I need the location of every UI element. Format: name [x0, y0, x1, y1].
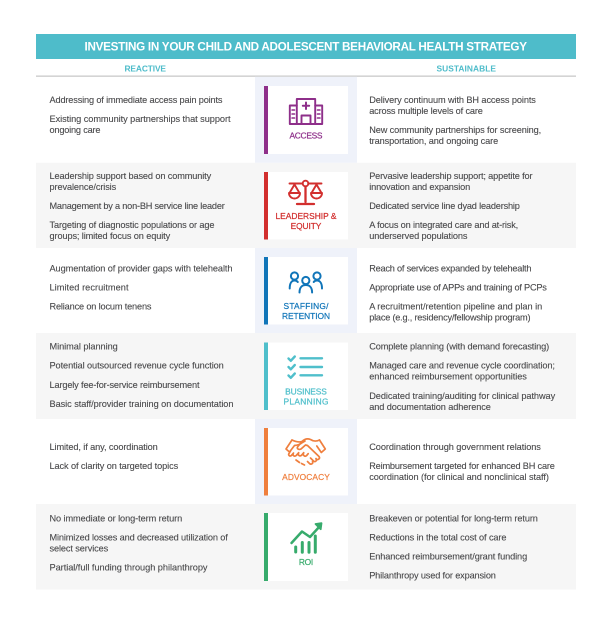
icon: people: [290, 272, 322, 292]
leadership sustainable text: innovation and expansion: [369, 182, 470, 192]
label: roi: ROI: [299, 557, 313, 567]
roi sustainable text: Reductions in the total cost of care: [369, 532, 506, 542]
leadership sustainable text: underserved populations: [369, 231, 468, 241]
access sustainable text: transportation, and ongoing care: [369, 136, 498, 146]
advocacy reactive text: [50, 442, 179, 471]
title banner: INVESTING IN YOUR CHILD AND ADOLESCENT BEHAVIORAL HEALTH STRATEGY: [84, 41, 527, 54]
label: business planning: PLANNING: [284, 396, 328, 406]
leadership reactive text: Management by a non-BH service line leader: [50, 201, 225, 211]
roi sustainable text: [369, 513, 538, 580]
leadership reactive text: Leadership support based on community: [50, 171, 212, 181]
roi reactive text: No immediate or long-term return: [50, 513, 182, 523]
advocacy sustainable text: Coordination through government relations: [369, 442, 541, 452]
leadership sustainable text: Pervasive leadership support; appetite for: [369, 171, 532, 181]
staffing sustainable text: Reach of services expanded by telehealth: [369, 263, 532, 273]
access sustainable text: across multiple levels of care: [369, 106, 483, 116]
icon: growth chart: [292, 523, 322, 552]
staffing reactive text: Augmentation of provider gaps with telehealth: [50, 263, 232, 273]
advocacy sustainable text: [369, 442, 555, 482]
business planning reactive text: Minimal planning: [50, 342, 118, 352]
icon: handshake: [286, 439, 325, 465]
business planning sustainable text: enhanced reimbursement opportunities: [369, 372, 527, 382]
access sustainable text: Delivery continuum with BH access points: [369, 95, 536, 105]
business planning sustainable text: Managed care and revenue cycle coordination;: [369, 361, 555, 371]
column heading: sustainable: SUSTAINABLE: [436, 64, 496, 74]
leadership reactive text: [50, 171, 225, 241]
label: access: ACCESS: [290, 130, 323, 140]
leadership card: [264, 172, 348, 240]
staffing reactive text: Reliance on locum tenens: [50, 301, 152, 311]
icon: checklist: [288, 356, 322, 378]
roi card: [264, 513, 348, 581]
roi reactive text: Minimized losses and decreased utilization of: [50, 532, 228, 542]
business planning card: [264, 342, 348, 410]
business planning reactive text: Basic staff/provider training on documentation: [50, 399, 234, 409]
business planning sustainable text: [369, 342, 556, 412]
staffing sustainable text: [369, 263, 547, 323]
business planning reactive text: [50, 342, 234, 409]
icon: scales: [289, 181, 322, 204]
advocacy reactive text: Limited, if any, coordination: [50, 442, 158, 452]
label: staffing and retention: STAFFING/: [284, 301, 329, 311]
label: leadership and equity: EQUITY: [291, 221, 322, 231]
leadership sustainable text: Dedicated service line dyad leadership: [369, 201, 520, 211]
staffing reactive text: Limited recruitment: [50, 282, 129, 292]
access sustainable text: New community partnerships for screening,: [369, 125, 541, 135]
advocacy sustainable text: Reimbursement targeted for enhanced BH care: [369, 461, 555, 471]
roi sustainable text: Enhanced reimbursement/grant funding: [369, 551, 527, 561]
business planning reactive text: Largely fee-for-service reimbursement: [50, 380, 200, 390]
staffing card: [264, 257, 348, 324]
roi reactive text: [50, 513, 228, 572]
label: advocacy: ADVOCACY: [282, 472, 330, 482]
access reactive text: Addressing of immediate access pain points: [50, 95, 223, 105]
leadership reactive text: Targeting of diagnostic populations or age: [50, 220, 214, 230]
business planning reactive text: Potential outsourced revenue cycle function: [50, 361, 224, 371]
leadership sustainable text: A focus on integrated care and at-risk,: [369, 220, 518, 230]
row: leadership and equity: [36, 163, 576, 248]
leadership reactive text: groups; limited focus on equity: [50, 231, 171, 241]
label: leadership and equity: [276, 211, 337, 231]
advocacy card: [264, 428, 348, 496]
business planning sustainable text: Complete planning (with demand forecasting): [369, 342, 549, 352]
icon: hospital: [290, 99, 322, 124]
label: business planning: BUSINESS: [285, 386, 327, 396]
row: business planning: [36, 333, 576, 419]
roi sustainable text: Philanthropy used for expansion: [369, 570, 496, 580]
row: access: [50, 77, 541, 163]
label: staffing and retention: [282, 301, 330, 321]
row: advocacy: [50, 419, 555, 504]
roi reactive text: Partial/full funding through philanthropy: [50, 562, 208, 572]
access sustainable text: [369, 95, 541, 146]
label: staffing and retention: RETENTION: [282, 311, 330, 321]
access card: [264, 86, 348, 154]
roi sustainable text: Breakeven or potential for long-term return: [369, 513, 538, 523]
column heading: reactive: REACTIVE: [124, 64, 166, 74]
staffing sustainable text: place (e.g., residency/fellowship program): [369, 313, 530, 323]
label: business planning: [284, 386, 328, 406]
advocacy sustainable text: coordination (for clinical and nonclinical staff): [369, 472, 549, 482]
title banner: [36, 34, 576, 59]
leadership reactive text: prevalence/crisis: [50, 182, 117, 192]
row: roi: [36, 504, 576, 590]
leadership sustainable text: [369, 171, 532, 241]
advocacy reactive text: Lack of clarity on targeted topics: [50, 461, 179, 471]
staffing sustainable text: A recruitment/retention pipeline and plan in: [369, 302, 542, 312]
access reactive text: [50, 95, 231, 135]
business planning sustainable text: Dedicated training/auditing for clinical pathway: [369, 391, 556, 401]
business planning sustainable text: and documentation adherence: [369, 402, 491, 412]
access reactive text: Existing community partnerships that support: [50, 114, 231, 124]
access reactive text: ongoing care: [50, 125, 100, 135]
staffing reactive text: [50, 263, 232, 311]
row: staffing and retention: [50, 248, 547, 333]
roi reactive text: select services: [50, 543, 109, 553]
staffing sustainable text: Appropriate use of APPs and training of PCPs: [369, 283, 547, 293]
label: leadership and equity: LEADERSHIP &: [276, 211, 337, 221]
